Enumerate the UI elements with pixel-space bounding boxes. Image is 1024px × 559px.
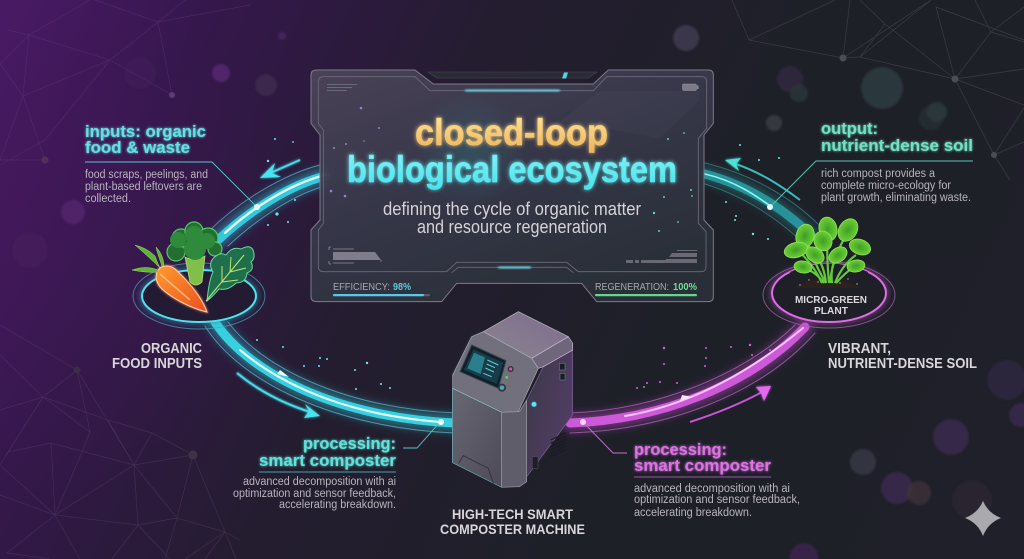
callout: inputs: food scraps, peelings, and bbox=[85, 169, 208, 181]
callout: processing cyan: advanced decomposition with ai bbox=[243, 476, 396, 488]
lid bbox=[483, 312, 568, 358]
subtitle: and resource regeneration bbox=[417, 217, 607, 237]
subtitle bbox=[383, 199, 641, 237]
lower front bbox=[452, 388, 502, 487]
callout: processing magenta bbox=[580, 419, 800, 519]
inner ring bbox=[142, 270, 256, 322]
buttons bbox=[498, 366, 514, 392]
efficiency stat: 98% bbox=[393, 281, 412, 293]
panel body bbox=[311, 70, 713, 302]
broccoli bbox=[167, 222, 222, 285]
panel teal glow bbox=[311, 70, 713, 302]
network mesh: bottom left bbox=[0, 325, 240, 559]
subtitle: defining the cycle of organic matter bbox=[383, 199, 641, 219]
callout: output: rich compost provides a bbox=[821, 168, 936, 180]
title line 2: biological ecosystem bbox=[347, 149, 677, 190]
efficiency stat bbox=[333, 281, 430, 296]
label: vibrant soil: VIBRANT, bbox=[828, 340, 891, 357]
callout: output: output: bbox=[821, 119, 878, 138]
arc: magenta lower (processing) bbox=[570, 325, 815, 433]
kale leaf bbox=[206, 247, 254, 301]
flow chevrons on bands bbox=[277, 370, 693, 401]
right side bbox=[519, 350, 573, 487]
callout: output bbox=[767, 119, 973, 210]
arrow: teal upper bbox=[725, 158, 800, 200]
callout: output: nutrient-dense soil bbox=[821, 136, 973, 155]
callout: inputs: plant-based leftovers are bbox=[85, 181, 202, 193]
callout: processing cyan: smart composter bbox=[259, 451, 396, 470]
label: vibrant soil: NUTRIENT-DENSE SOIL bbox=[828, 355, 977, 372]
vents bbox=[551, 433, 566, 457]
hatch bbox=[459, 456, 493, 483]
central glass panel bbox=[311, 70, 713, 302]
lower inner bracket bbox=[452, 267, 573, 273]
network mesh: top left bbox=[0, 0, 250, 165]
right shoulder bbox=[532, 337, 573, 368]
efficiency stat: EFFICIENCY: bbox=[333, 281, 390, 293]
panel particles bbox=[330, 107, 380, 197]
arrow: cyan lower bbox=[237, 373, 320, 418]
arrow: cyan upper bbox=[260, 160, 300, 178]
title line 1: closed-loop bbox=[415, 112, 608, 153]
top-left lines bbox=[327, 84, 357, 90]
regeneration stat: 100% bbox=[673, 281, 698, 293]
callout: inputs: inputs: organic bbox=[85, 122, 206, 141]
callout: processing magenta: advanced decomposition with ai bbox=[634, 483, 790, 495]
lower port bbox=[532, 457, 538, 468]
regeneration stat bbox=[595, 281, 698, 296]
label: organic food inputs bbox=[112, 340, 202, 372]
arrow: magenta bbox=[690, 386, 771, 422]
arc: cyan upper (inputs) bbox=[208, 165, 325, 246]
ring label: MICRO-GREEN bbox=[795, 294, 867, 306]
machine glow bbox=[453, 330, 497, 400]
callout: processing cyan: optimization and sensor feedback, bbox=[233, 488, 396, 500]
inner frame bbox=[318, 77, 707, 272]
callout: inputs bbox=[85, 122, 260, 210]
label: composter machine bbox=[440, 506, 585, 537]
inner ring bbox=[772, 264, 886, 322]
ring label bbox=[795, 294, 867, 317]
carrot bbox=[156, 266, 207, 312]
label: organic food inputs: ORGANIC bbox=[141, 340, 202, 357]
panel particles: teal bbox=[653, 132, 693, 232]
label: organic food inputs: FOOD INPUTS bbox=[112, 355, 202, 372]
leaves bbox=[782, 215, 873, 274]
ring label: PLANT bbox=[814, 305, 849, 317]
label: vibrant soil bbox=[828, 340, 977, 372]
arc: teal upper (output) bbox=[705, 163, 820, 240]
callout: processing magenta: accelerating breakdown. bbox=[634, 507, 752, 519]
callout: processing cyan: accelerating breakdown. bbox=[279, 499, 396, 511]
arc: cyan lower (processing) bbox=[205, 322, 455, 433]
label: composter machine: HIGH-TECH SMART bbox=[452, 506, 573, 522]
plant backing masks ring top bbox=[790, 264, 868, 288]
regeneration stat: REGENERATION: bbox=[595, 281, 669, 293]
notch accent bbox=[562, 72, 568, 78]
callout: inputs: collected. bbox=[85, 193, 131, 205]
corner strip bbox=[502, 400, 527, 487]
screen bbox=[460, 345, 506, 388]
soil specks bbox=[799, 278, 858, 286]
callout: processing cyan bbox=[233, 419, 444, 511]
callout: inputs: food & waste bbox=[85, 138, 190, 157]
bottom-left widget bbox=[329, 247, 381, 264]
icon: micro-green plant on ring bbox=[763, 215, 895, 328]
soil mound bbox=[795, 279, 861, 288]
icon: smart composter machine bbox=[452, 312, 573, 487]
callout: processing cyan: processing: bbox=[303, 434, 396, 453]
callout: output: plant growth, eliminating waste. bbox=[821, 192, 971, 204]
bottom glow strip bbox=[498, 266, 531, 268]
label: composter machine: COMPOSTER MACHINE bbox=[440, 521, 585, 537]
particles bbox=[256, 138, 780, 390]
icon: organic food on ring bbox=[132, 222, 265, 329]
outer ring bbox=[133, 263, 265, 329]
particles: magenta bbox=[636, 344, 771, 389]
callout: processing magenta: optimization and sensor feedback, bbox=[634, 494, 800, 506]
glass reflection bbox=[560, 91, 700, 138]
top notch bar bbox=[428, 72, 597, 78]
outer ring bbox=[763, 262, 895, 328]
carrot greens bbox=[132, 245, 164, 272]
battery icon bbox=[682, 84, 698, 90]
callout: output: complete micro-ecology for bbox=[821, 180, 951, 192]
status led bbox=[532, 402, 536, 407]
network mesh: top right bbox=[732, 0, 1024, 180]
stems bbox=[797, 228, 856, 283]
callout: processing magenta: processing: bbox=[634, 440, 727, 459]
top glow strip bbox=[465, 90, 560, 92]
side ports bbox=[559, 363, 565, 380]
bottom-right widget bbox=[626, 250, 697, 263]
front slanted face bbox=[453, 332, 538, 412]
callout: processing magenta: smart composter bbox=[634, 456, 771, 475]
icon: sparkle bbox=[965, 501, 1001, 536]
